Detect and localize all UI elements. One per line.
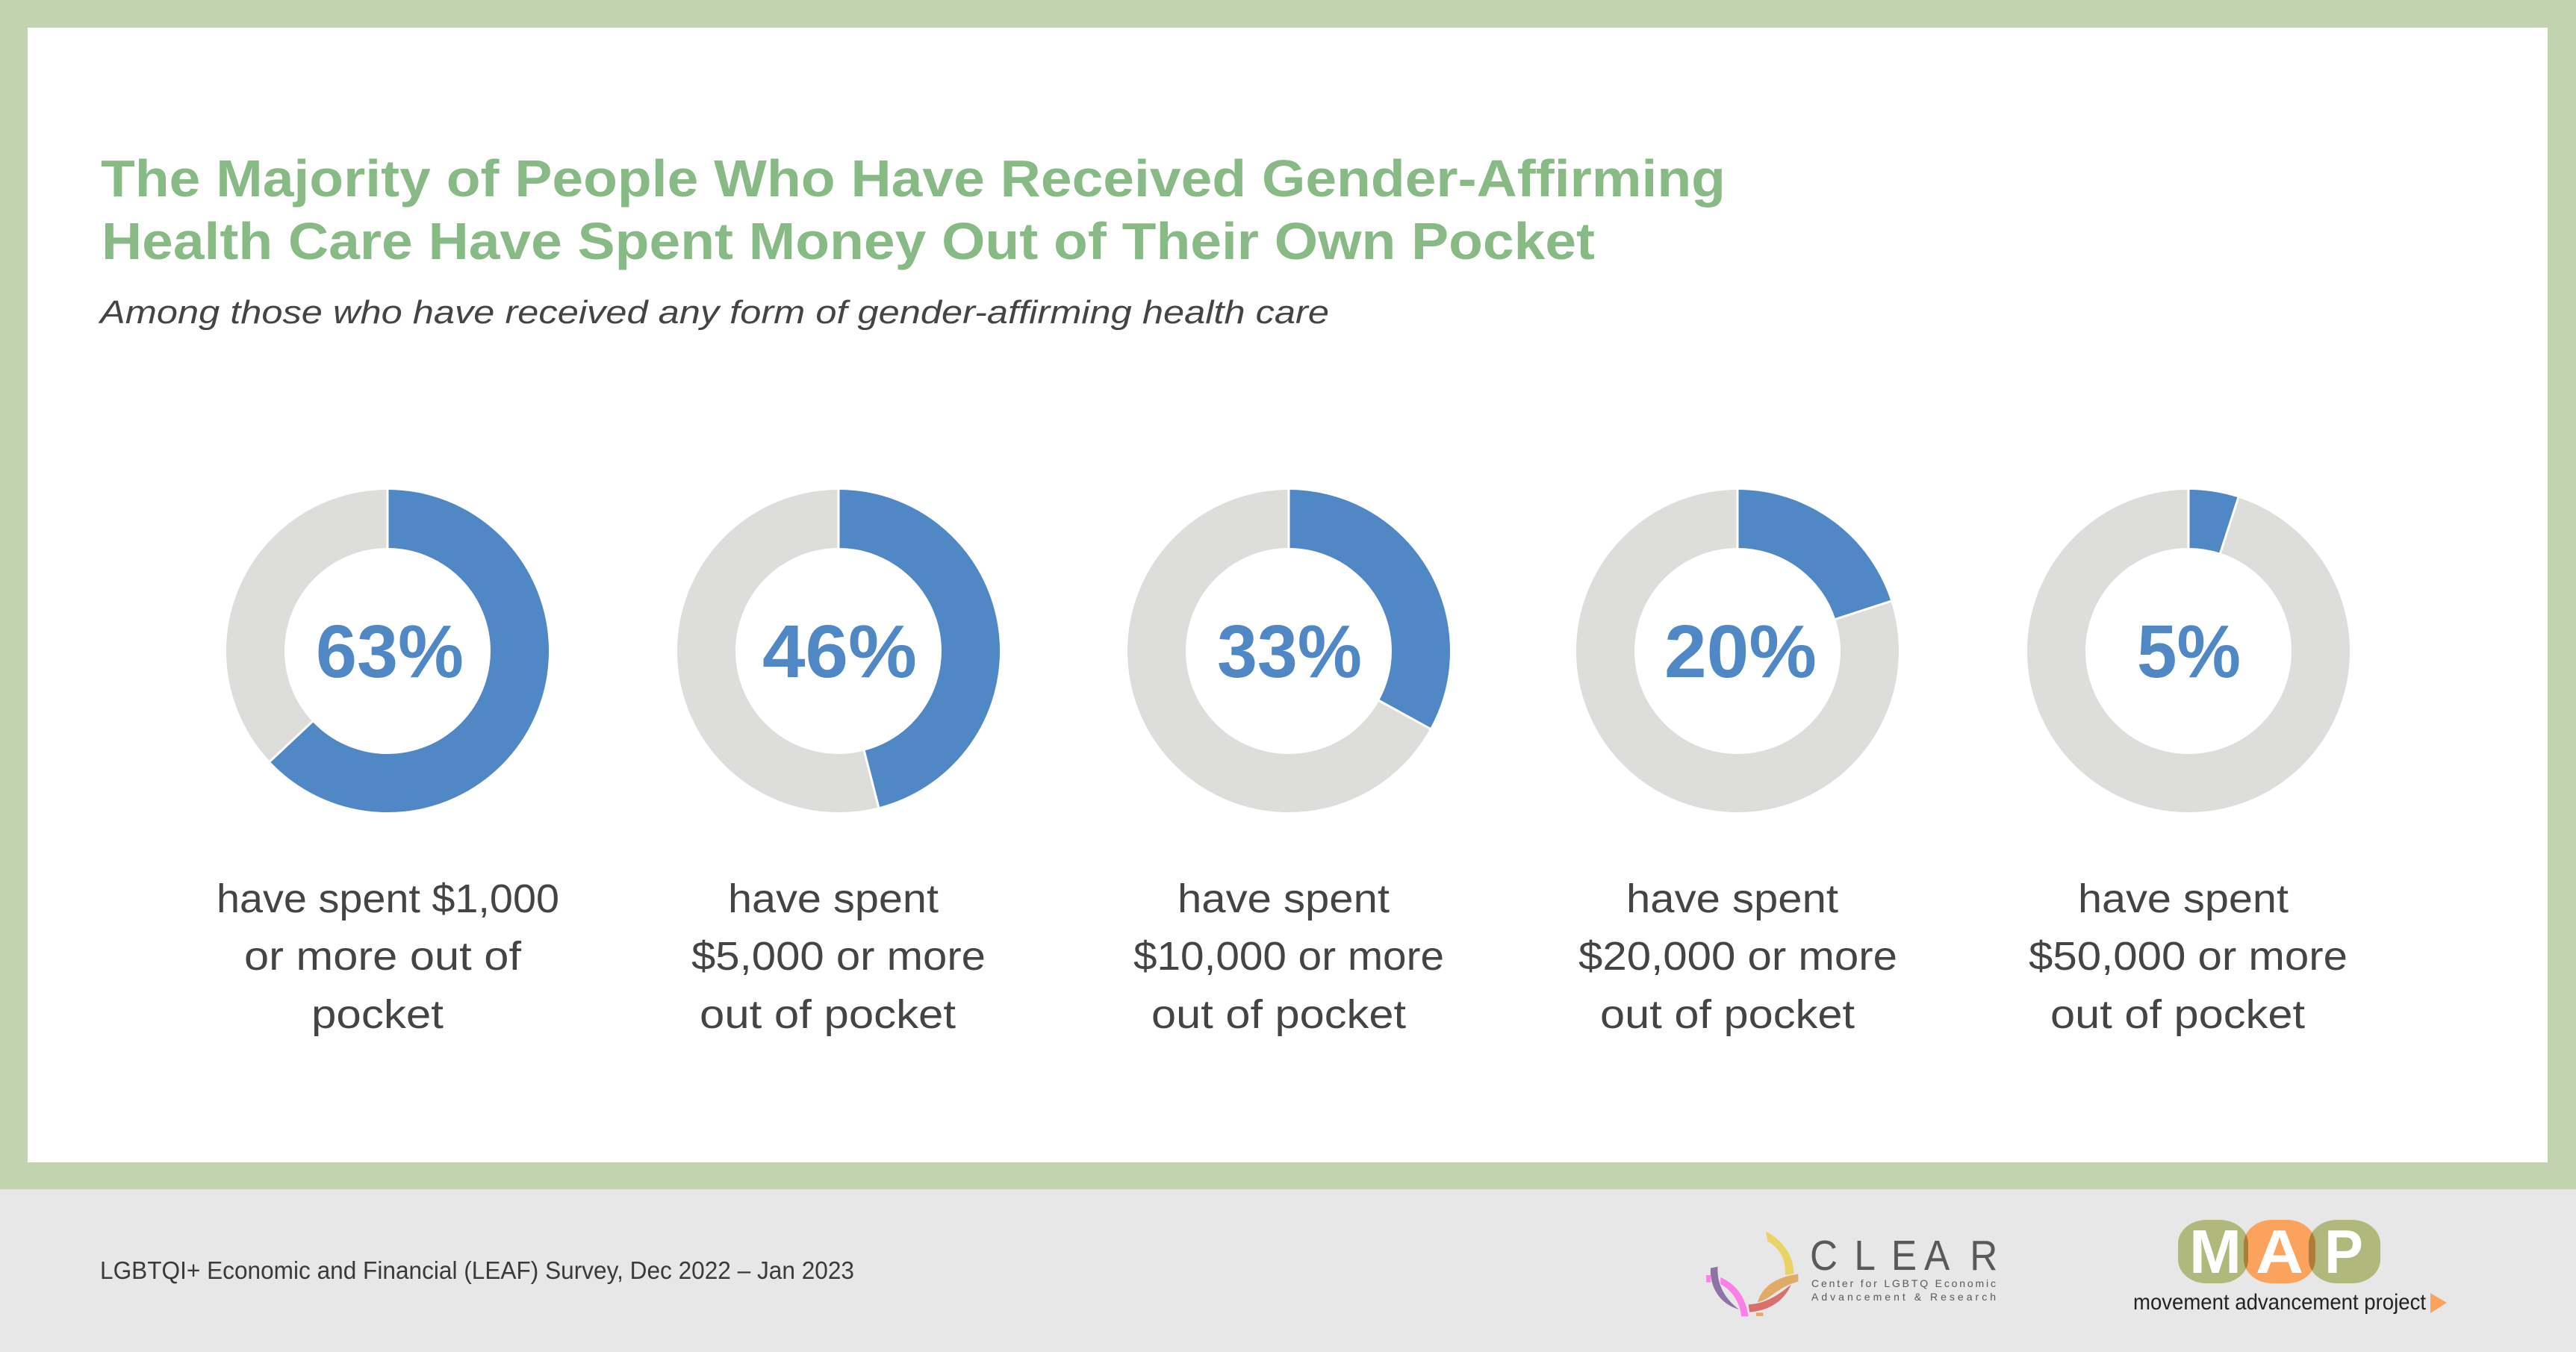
label: $5,000: have spent [728, 876, 939, 921]
CLEAR logo text: Center for LGBTQ Economic [1811, 1277, 1996, 1289]
label: $10,000: out of pocket [1151, 992, 1406, 1037]
MAP logo [2133, 1217, 2447, 1315]
MAP logo: movement advancement project [2133, 1290, 2427, 1315]
title: Health Care Have Spent Money Out of Their Own Pocket [102, 212, 1595, 270]
label: $20,000: out of pocket [1600, 992, 1855, 1037]
CLEAR logo text [1810, 1233, 1997, 1303]
donut chart: 46%: 46% [762, 610, 917, 694]
title: The Majority of People Who Have Received Gender-Affirming [101, 149, 1726, 208]
label: $5,000: $5,000 or more [691, 934, 986, 979]
label: $50,000: have spent [2078, 876, 2289, 921]
donut chart: 63% [255, 489, 520, 783]
label: $5,000 [691, 876, 986, 1037]
donut chart: 20% [1605, 489, 1891, 783]
donut chart: 5% [2056, 489, 2321, 783]
label: $20,000: have spent [1626, 876, 1838, 921]
label: $5,000: out of pocket [700, 992, 956, 1037]
donut chart: 20%: 20% [1664, 610, 1817, 694]
MAP logo: M [2189, 1217, 2241, 1286]
label: $20,000 [1578, 876, 1897, 1037]
MAP logo: P [2324, 1217, 2363, 1286]
icon: CLEAR logo mark [1706, 1231, 1798, 1316]
MAP logo: A [2256, 1217, 2303, 1286]
label: $10,000: have spent [1177, 876, 1390, 921]
donut chart: 63%: 63% [316, 610, 464, 694]
CLEAR logo text: Advancement & Research [1811, 1291, 1996, 1303]
label: $50,000: $50,000 or more [2029, 934, 2348, 979]
donut chart: 33%: 33% [1217, 610, 1362, 694]
donut chart: 33% [1157, 489, 1431, 783]
label: $50,000: out of pocket [2050, 992, 2305, 1037]
footer band [0, 1189, 2576, 1352]
donut chart: 5%: 5% [2137, 610, 2241, 694]
label: $10,000 [1133, 876, 1444, 1037]
label: $20,000: $20,000 or more [1578, 934, 1897, 979]
label: $1,000: have spent $1,000 [217, 876, 559, 921]
source note: LGBTQI+ Economic and Financial (LEAF) Survey, Dec 2022 – Jan 2023 [100, 1256, 854, 1284]
label: $50,000 [2029, 876, 2348, 1037]
donut chart: 46% [706, 489, 971, 808]
CLEAR logo text: CLEAR [1810, 1233, 1997, 1280]
label: $1,000: pocket [311, 992, 444, 1037]
label: $1,000: or more out of [244, 934, 522, 979]
label: $10,000: $10,000 or more [1133, 934, 1444, 979]
subtitle: Among those who have received any form of gender-affirming health care [98, 294, 1329, 331]
label: $1,000 [217, 876, 559, 1037]
title [101, 149, 1726, 270]
